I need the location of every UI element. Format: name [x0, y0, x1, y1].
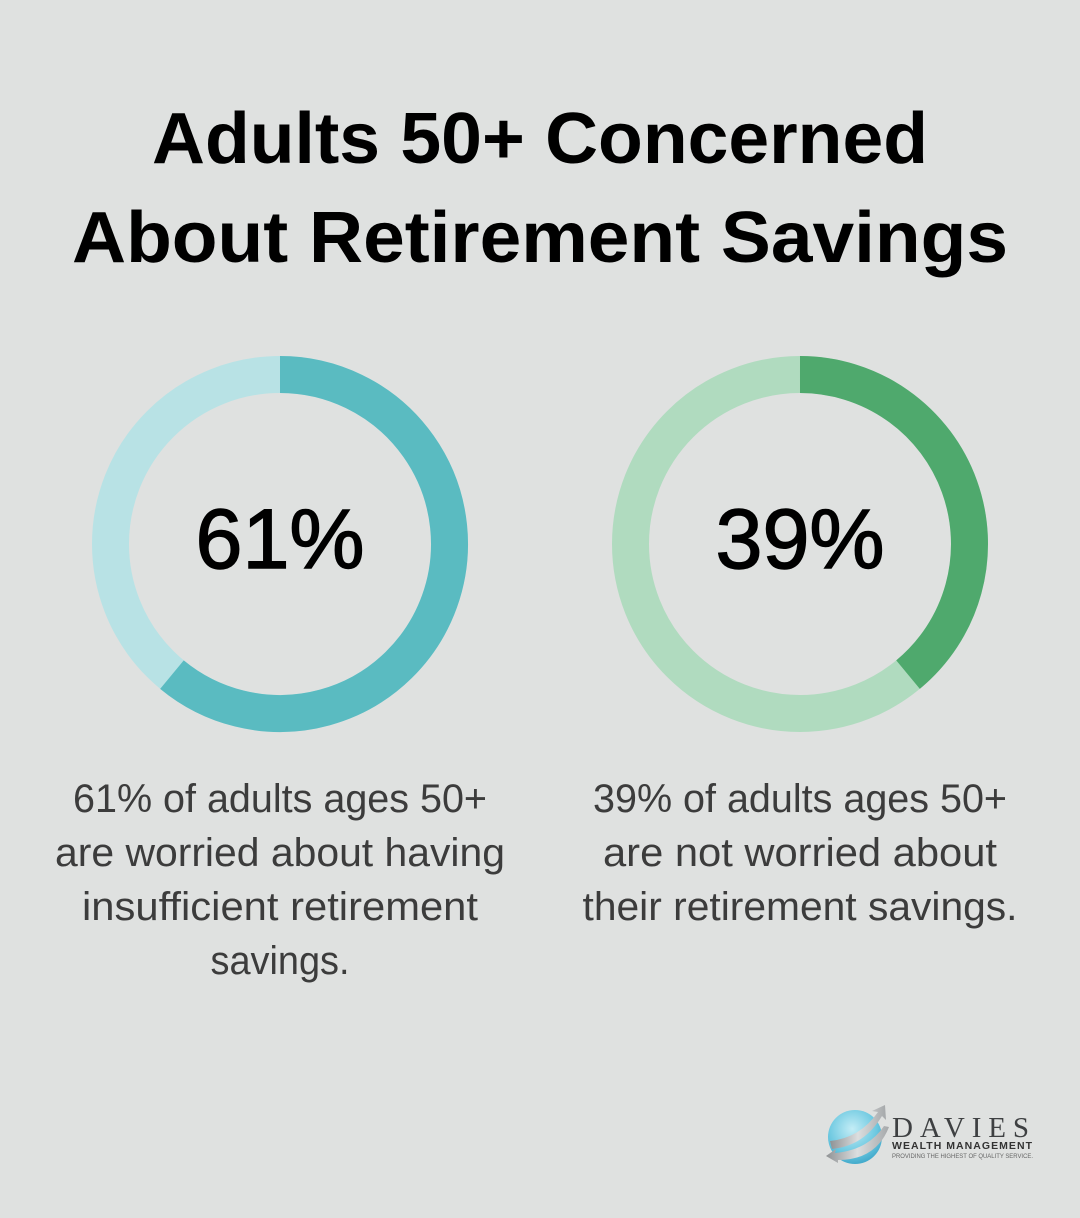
description: 39%: 39% of adults ages 50+	[593, 777, 1007, 821]
title: About Retirement Savings	[72, 198, 1008, 278]
description: 61%: insufficient retirement	[82, 885, 478, 929]
description: 61%: 61% of adults ages 50+	[73, 777, 487, 821]
wordmark: WEALTH MANAGEMENT	[892, 1140, 1033, 1152]
description: 61%: savings.	[210, 939, 350, 983]
description: 39%: their retirement savings.	[582, 885, 1018, 929]
title	[72, 99, 1008, 278]
donut chart: 39%	[630, 374, 970, 714]
wordmark: DAVIES	[892, 1112, 1029, 1144]
donut chart: 61%	[110, 374, 450, 714]
title: Adults 50+ Concerned	[152, 99, 928, 179]
description: 61%	[55, 777, 505, 983]
wordmark	[892, 1112, 1033, 1160]
logo: Davies Wealth Management	[826, 1105, 1033, 1164]
value: 39%: 39%	[716, 492, 884, 586]
description: 39%	[582, 777, 1018, 929]
value: 61%: 61%	[196, 492, 364, 586]
description: 61%: are worried about having	[55, 831, 505, 875]
description: 39%: are not worried about	[603, 831, 997, 875]
wordmark: PROVIDING THE HIGHEST OF QUALITY SERVICE.	[892, 1153, 1033, 1160]
icon: globe with arrows	[826, 1105, 889, 1164]
